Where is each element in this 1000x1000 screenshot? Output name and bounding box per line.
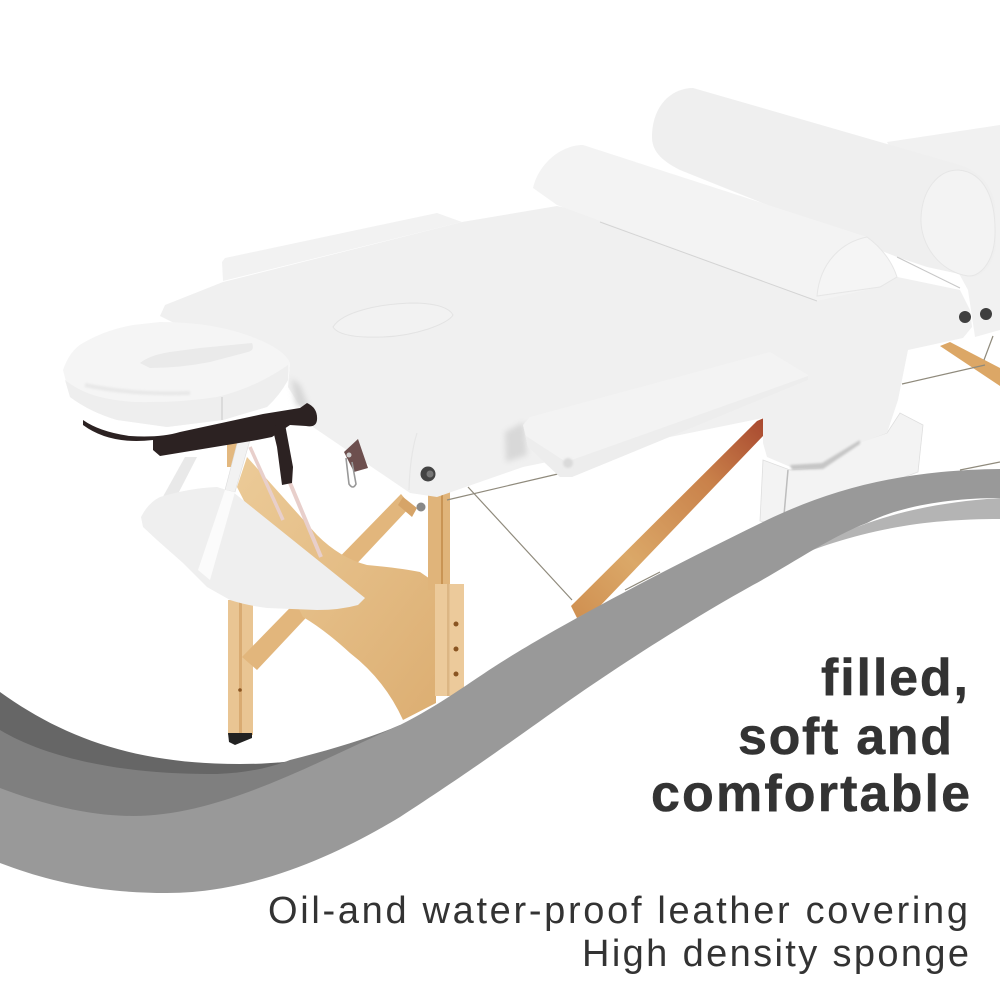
- side pocket: [760, 413, 923, 525]
- tension wires: [447, 336, 1000, 600]
- bolster end cap: [921, 170, 995, 276]
- brace fitting: [398, 497, 417, 517]
- feature line 1: Oil-and water-proof leather covering: [268, 890, 968, 932]
- headline line 2: soft and: [738, 708, 952, 766]
- table top: [160, 206, 972, 497]
- corner seam: [409, 433, 417, 490]
- face cradle cushion: [63, 322, 290, 427]
- pale band: [85, 385, 190, 393]
- mid wave: [0, 725, 400, 830]
- shadow beside headrest: [291, 378, 310, 410]
- strap on hand rest: [198, 490, 235, 580]
- shadow before armrest: [505, 422, 527, 462]
- shelf straps and hand rest: [141, 440, 365, 610]
- front armrest board: [523, 352, 808, 477]
- metal knobs: [416, 308, 992, 512]
- face hole: [333, 303, 453, 337]
- headrest bracket: [83, 403, 317, 485]
- rear armrest board: [222, 213, 462, 281]
- feature line 2: High density sponge: [582, 933, 969, 975]
- decorative grey waves: [0, 469, 1000, 893]
- right lower leg: [435, 584, 464, 696]
- pink cord lower: [290, 483, 321, 557]
- half-round bolster: [533, 145, 960, 301]
- headline line 1: filled,: [821, 649, 968, 707]
- cushion side: [65, 365, 288, 427]
- wood panel: [237, 457, 436, 720]
- lever: [272, 424, 293, 485]
- pink cord upper: [250, 447, 283, 520]
- latch: [344, 439, 368, 487]
- massage table illustration: [63, 88, 1000, 745]
- front strap: [225, 440, 250, 492]
- face opening: [140, 343, 253, 368]
- cross brace: [242, 494, 411, 670]
- long diagonal brace: [571, 418, 764, 618]
- large bolster: [652, 88, 996, 277]
- pocket fold shadow: [790, 440, 860, 470]
- main wave: [0, 469, 1000, 893]
- right upper leg: [428, 490, 450, 590]
- rear strap: [150, 457, 197, 523]
- feature text: [268, 890, 969, 975]
- pale trailing wave: [800, 498, 1000, 555]
- headline: [651, 649, 970, 823]
- dark wave: [0, 692, 300, 790]
- wooden frame: [227, 342, 1000, 745]
- headline line 3: comfortable: [651, 765, 970, 823]
- left leg: [227, 443, 253, 745]
- right diagonal brace: [940, 342, 1000, 386]
- hand rest: [141, 487, 365, 610]
- rear table section: [887, 125, 1000, 337]
